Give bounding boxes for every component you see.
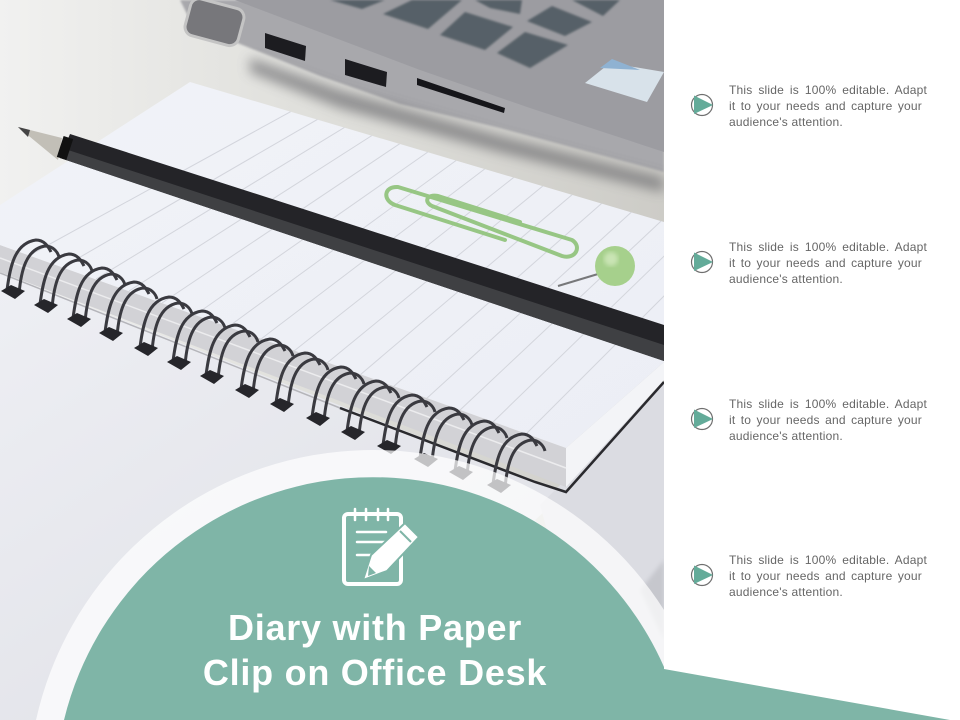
desk surface — [0, 0, 664, 528]
text block: it to your needs and capture your — [729, 413, 922, 427]
text block: audience's attention. — [729, 115, 843, 129]
teal half circle — [64, 477, 664, 720]
spiral binding — [1, 240, 545, 493]
text block: audience's attention. — [729, 585, 843, 599]
text block: This slide is 100% editable. Adapt — [729, 83, 927, 97]
ports — [265, 33, 306, 61]
laptop hinge — [183, 0, 246, 48]
text block: This slide is 100% editable. Adapt — [729, 397, 927, 411]
text block — [729, 397, 927, 443]
icon: play bullet — [690, 564, 714, 586]
item 1: bullet and text — [690, 83, 927, 129]
laptop shadow — [250, 58, 664, 192]
text block: it to your needs and capture your — [729, 256, 922, 270]
text block: it to your needs and capture your — [729, 569, 922, 583]
ruled top page — [0, 82, 664, 448]
text block — [729, 83, 927, 129]
keyboard keys — [330, 0, 620, 68]
sticker — [585, 63, 664, 102]
translucent white ring — [36, 450, 664, 720]
push pin — [558, 246, 635, 286]
title — [203, 607, 547, 693]
title: Clip on Office Desk — [203, 652, 547, 693]
icon: play bullet — [690, 94, 714, 116]
pencil — [18, 127, 664, 361]
icon: play bullet — [690, 408, 714, 430]
text block — [729, 240, 927, 286]
paper clip — [386, 187, 577, 257]
icon: play bullet — [690, 250, 714, 274]
icon: notepad and pencil — [344, 509, 419, 584]
item 2: bullet and text — [690, 240, 927, 286]
text block: it to your needs and capture your — [729, 99, 922, 113]
laptop — [180, 0, 664, 192]
text block: audience's attention. — [729, 272, 843, 286]
text block: This slide is 100% editable. Adapt — [729, 240, 927, 254]
text block: This slide is 100% editable. Adapt — [729, 553, 927, 567]
text block: audience's attention. — [729, 429, 843, 443]
text block — [729, 553, 927, 599]
teal bottom wedge — [664, 669, 950, 720]
page stack edge — [0, 245, 566, 487]
title: Diary with Paper — [228, 607, 522, 648]
item 4: bullet and text — [690, 553, 927, 599]
notebook cover and lower page — [0, 310, 555, 720]
item 3: bullet and text — [690, 397, 927, 443]
